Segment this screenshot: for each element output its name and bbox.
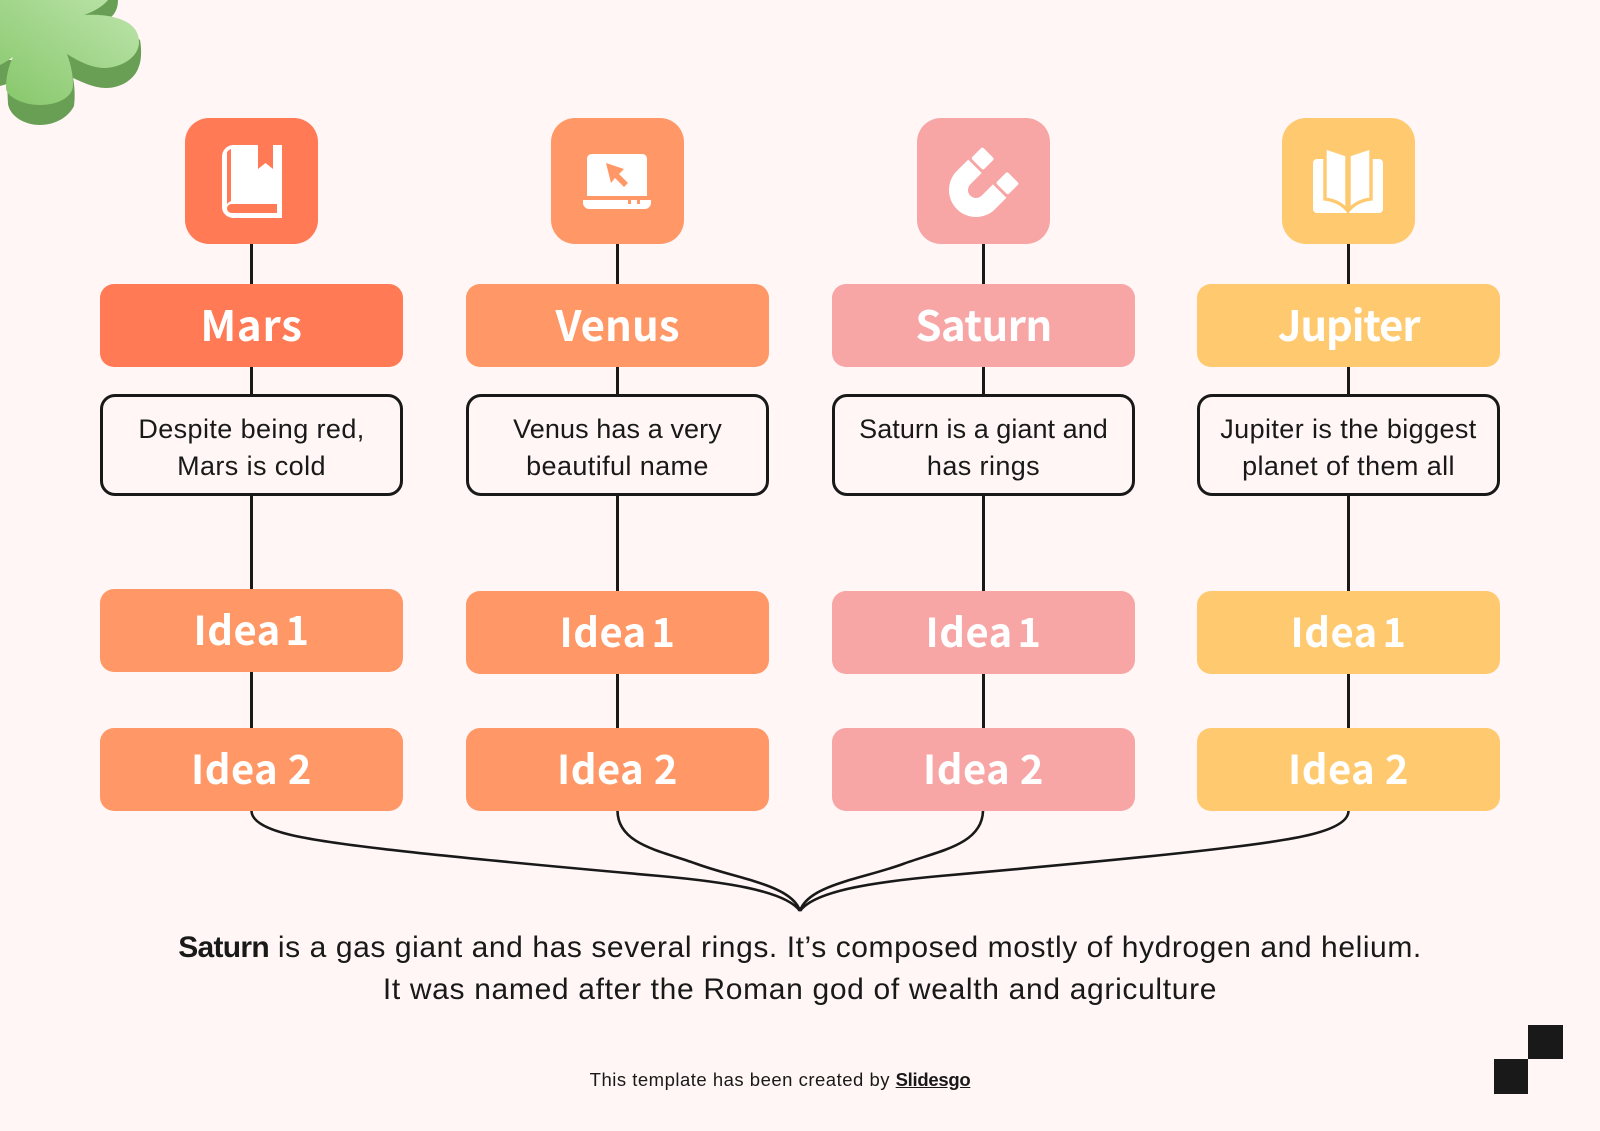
text: Venus description (466, 394, 769, 496)
box: Idea 1 (100, 589, 403, 672)
heading: Mars (100, 284, 403, 367)
box: Idea 1: Idea 1 (926, 601, 1041, 659)
text: Saturn description: Saturn is a giant and (859, 414, 1108, 444)
summary text: It was named after the Roman god of wealth and agriculture (383, 973, 1217, 1006)
text: Mars description: Despite being red, (138, 414, 365, 444)
heading: Saturn: Saturn (915, 293, 1052, 354)
text: Mars description: Mars is cold (177, 450, 326, 480)
icon: open book (1282, 118, 1415, 244)
panel: Mars column (100, 118, 403, 811)
decorative black squares (1494, 1025, 1563, 1094)
heading: Venus: Venus (555, 293, 680, 354)
icon: closed book (185, 118, 318, 244)
decorative green 3D flower (0, 0, 142, 125)
box: Idea 2: Idea 2 (557, 738, 678, 796)
heading: Jupiter: Jupiter (1278, 293, 1419, 354)
box: Idea 2 (1197, 728, 1500, 811)
box: Idea 1: Idea 1 (194, 599, 309, 657)
summary text (178, 931, 1422, 1006)
text: Jupiter description: planet of them all (1242, 450, 1455, 480)
text: Jupiter description (1197, 394, 1500, 496)
box: Idea 2 (100, 728, 403, 811)
panel: Saturn column (832, 118, 1135, 811)
box: Idea 1 (832, 591, 1135, 674)
icon: laptop with cursor (551, 118, 684, 244)
box: Idea 2: Idea 2 (923, 738, 1044, 796)
summary text: Saturn is a gas giant and has several rings. It’s composed mostly of hydrogen and helium. (178, 931, 1422, 964)
icon: magnet (917, 118, 1050, 244)
text: Venus description: beautiful name (526, 450, 709, 480)
heading: Mars: Mars (200, 293, 303, 354)
panel: Venus column (466, 118, 769, 811)
text: Mars description (100, 394, 403, 496)
box: Idea 1 (466, 591, 769, 674)
box: Idea 2 (832, 728, 1135, 811)
heading: Venus (466, 284, 769, 367)
heading: Saturn (832, 284, 1135, 367)
box: Idea 2 (466, 728, 769, 811)
panel: Jupiter column (1197, 118, 1500, 811)
box: Idea 1 (1197, 591, 1500, 674)
box: Idea 2: Idea 2 (191, 738, 312, 796)
text: Venus description: Venus has a very (513, 414, 722, 444)
text: Saturn description (832, 394, 1135, 496)
box: Idea 1: Idea 1 (560, 601, 675, 659)
box: Idea 1: Idea 1 (1291, 601, 1406, 659)
box: Idea 2: Idea 2 (1288, 738, 1409, 796)
text: Jupiter description: Jupiter is the biggest (1220, 414, 1477, 444)
heading: Jupiter (1197, 284, 1500, 367)
footer credit: This template has been created by Slidesgo (590, 1069, 970, 1090)
text: Saturn description: has rings (927, 450, 1040, 480)
